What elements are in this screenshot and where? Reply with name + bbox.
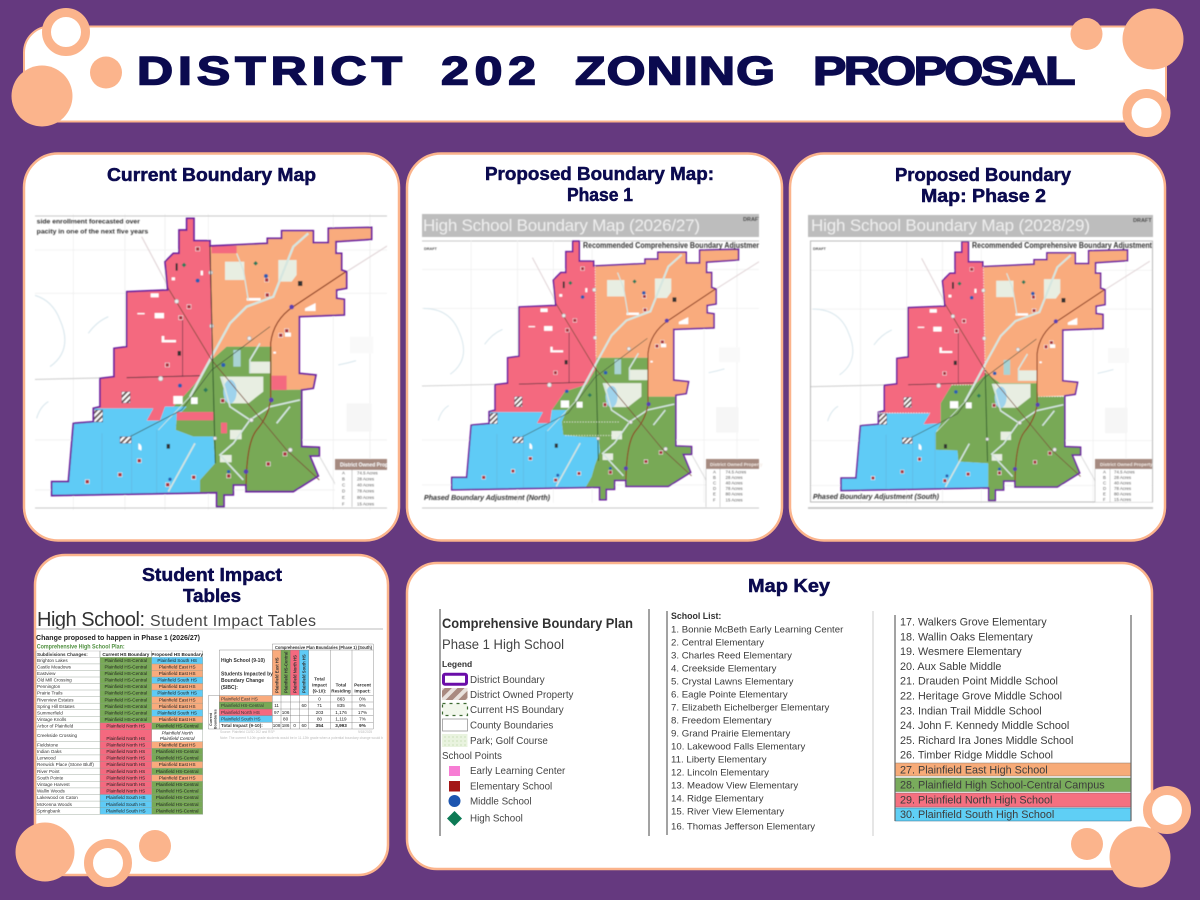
- high school colour rows: [895, 763, 1131, 821]
- legend column: Phase 1 High School: [442, 637, 564, 652]
- table: district owned property: 40 Acres: [357, 482, 375, 488]
- map title band: High School Boundary Map (2028/29): [811, 216, 1090, 235]
- school list: 17-30: 25. Richard Ira Jones Middle School: [900, 735, 1073, 747]
- table: subdivision changes: Lakewood on Caton: [37, 795, 78, 800]
- table: district owned property: 80 Acres: [1114, 492, 1132, 496]
- legend column: High School: [470, 814, 523, 824]
- table: district owned property: C: [713, 480, 716, 486]
- table: subdivision changes: [36, 651, 203, 814]
- table: district owned property: 15 Acres: [357, 502, 375, 506]
- table: district owned property: 74.5 Acres: [726, 470, 747, 474]
- table: students impacted by boundary change: 863: [337, 697, 345, 702]
- map title band: High School Boundary Map (2026/27): [423, 216, 700, 235]
- table: district owned property: C: [342, 482, 345, 488]
- table: students impacted by boundary change: 60: [301, 703, 307, 708]
- table: subdivision changes: Plainfield HS-Central: [104, 665, 147, 670]
- legend column: School Points: [442, 751, 502, 762]
- table: subdivision changes: Plainfield East HS: [159, 775, 196, 780]
- map title band: [422, 214, 762, 237]
- table: subdivision changes: Springbank: [37, 808, 61, 813]
- map: phase 2 boundaries: Recommended Comprehensive Boundary Adjustment: [972, 241, 1152, 250]
- table: students impacted by boundary change: Plainfield HS-Central: [284, 652, 288, 693]
- table: students impacted by boundary change: Total Impact (9-10):: [221, 723, 263, 728]
- table: students impacted by boundary change: 11: [274, 703, 279, 708]
- table: district owned property: [335, 459, 397, 507]
- table: subdivision changes: Plainfield South HS: [157, 658, 197, 663]
- table: subdivision changes: Plainfield HS-Central: [156, 802, 199, 807]
- school list: 17-30: 27. Plainfield East High School: [900, 764, 1048, 776]
- map: phase 1 boundaries: DRAFT: [424, 247, 438, 251]
- school list: 1-16: 7. Elizabeth Eichelberger Elementary: [671, 702, 830, 714]
- table: district owned property: D: [713, 486, 716, 491]
- map: phase 1 boundaries: Recommended Comprehensive Boundary Adjustment: [583, 241, 763, 250]
- table: subdivision changes: Plainfield HS-Central: [156, 795, 199, 800]
- table: subdivision changes: Fieldstone: [37, 742, 59, 747]
- table: district owned property: A: [1103, 470, 1106, 474]
- legend column: Park; Golf Course: [470, 736, 548, 747]
- title: District 202 Zoning Proposal: PROPOSAL: [813, 48, 1076, 93]
- table: district owned property: 28 Acres: [1114, 475, 1132, 480]
- table: students impacted by boundary change: (9-10):: [313, 688, 327, 694]
- table: students impacted by boundary change: Total: [314, 676, 325, 682]
- table: subdivision changes: Plainfield North HS: [106, 789, 145, 794]
- table: students impacted by boundary change: Plainfield HS-Central: [221, 703, 264, 708]
- table: subdivision changes: Wallin Woods: [37, 789, 66, 794]
- table: district owned property: D: [1103, 486, 1106, 491]
- table: district owned property: [1095, 459, 1153, 502]
- table: students impacted by boundary change: Impact:: [354, 688, 371, 694]
- map: current boundaries: pacity in one of the next five years: [37, 228, 148, 235]
- school list: 1-16: 4. Creekside Elementary: [671, 664, 777, 674]
- table: students impacted by boundary change: 80: [317, 717, 322, 722]
- map: phase 1 boundaries: Phased Boundary Adjustment (North): [424, 493, 550, 502]
- table: subdivision changes: Prairie Trails: [37, 691, 63, 696]
- school list: 1-16: 13. Meadow View Elementary: [671, 780, 798, 792]
- table: district owned property: 74.5 Acres: [357, 470, 379, 476]
- table: subdivision changes: Arbor of Plainfield: [37, 724, 74, 728]
- table: subdivision changes: Plainfield HS-Central: [156, 724, 199, 728]
- table: subdivision changes: Plainfield North: [162, 730, 193, 736]
- icon: middle school: [448, 795, 460, 807]
- heading: current boundary map: Current Boundary Map: [107, 165, 316, 185]
- table: students impacted by boundary change: Plainfield South HS: [302, 654, 306, 693]
- table: subdivision changes: McKenna Woods: [37, 802, 73, 807]
- map title band: [808, 215, 1153, 237]
- table: subdivision changes: Plainfield South HS: [106, 808, 146, 813]
- legend column: District Owned Property: [470, 690, 574, 701]
- heading: phase 2: [895, 165, 1071, 206]
- table: subdivision changes: Plainfield East HS: [159, 742, 196, 747]
- icon: county boundaries: [442, 719, 468, 731]
- table: subdivision changes: Plainfield HS-Central: [104, 704, 147, 709]
- table: students impacted by boundary change: 203: [316, 710, 324, 715]
- table: students impacted by boundary change: 9%: [359, 723, 366, 728]
- school list: 1-16: 1. Bonnie McBeth Early Learning Center: [671, 624, 844, 636]
- table: subdivision changes: Plainfield Central: [160, 736, 196, 741]
- table: district owned property: B: [713, 475, 716, 480]
- school list: 17-30: 23. Indian Trail Middle School: [900, 705, 1042, 717]
- icon: park: [442, 734, 468, 747]
- table: subdivision changes: Plainfield East HS: [159, 684, 196, 689]
- school list: 17-30: 28. Plainfield High School-Central Campus: [900, 780, 1105, 792]
- legend column: District Boundary: [470, 675, 545, 686]
- table: students impacted by boundary change: 60: [301, 723, 307, 728]
- panel: proposed boundary map phase 1: [407, 154, 782, 540]
- icon: current hs boundary: [442, 704, 468, 716]
- table: subdivision changes: Riverview Estates: [37, 697, 74, 702]
- legend column: Middle School: [470, 796, 532, 808]
- table: students impacted by boundary change: 106: [282, 710, 290, 715]
- heading: student impact tables: Tables: [183, 586, 241, 606]
- school list: 1-16: 14. Ridge Elementary: [671, 794, 764, 804]
- table: subdivision changes: Plainfield HS-Central: [104, 710, 147, 715]
- table: students impacted by boundary change: Plainfield East HS: [221, 697, 258, 702]
- table: district owned property: A: [713, 470, 716, 474]
- table: students impacted by boundary change: 1,119: [335, 717, 347, 722]
- panel: proposed boundary map phase 2: [790, 154, 1165, 540]
- legend column: Current HS Boundary: [470, 705, 564, 716]
- table: students impacted by boundary change: Note: The current 9-10th grade students would be in 11-12th grade when a potential boundary change would b: [220, 736, 383, 740]
- icon: district boundary: [444, 674, 466, 684]
- school list: 1-16: 6. Eagle Pointe Elementary: [671, 690, 788, 700]
- table: subdivision changes: Plainfield HS-Central: [156, 782, 199, 787]
- heading: phase 2: Map: Phase 2: [921, 186, 1046, 206]
- table: subdivision changes: Spring Hill Estates: [37, 704, 75, 709]
- table: students impacted by boundary change: Percent: [354, 682, 371, 688]
- school list: 1-16: School List:: [671, 611, 721, 621]
- title: District 202 Zoning Proposal: [137, 48, 1076, 93]
- table: subdivision changes: Plainfield East HS: [159, 665, 196, 670]
- school list: 1-16: 10. Lakewood Falls Elementary: [671, 742, 805, 752]
- table: students impacted by boundary change: High School (9-10): [221, 658, 265, 664]
- table: district owned property: 28 Acres: [357, 476, 375, 482]
- table: subdivision changes: Castle Meadows: [37, 665, 72, 670]
- table: subdivision changes: Plainfield South HS: [157, 678, 197, 683]
- table: district owned property: E: [1103, 492, 1106, 496]
- table: students impacted by boundary change: Plainfield East HS: [274, 657, 280, 693]
- table: subdivision changes: Old Mill Crossing: [37, 678, 72, 683]
- table: district owned property: 78 Acres: [726, 486, 743, 491]
- school list: 1-16: 12. Lincoln Elementary: [671, 768, 769, 778]
- table: students impacted by boundary change: Plainfield South HS: [221, 717, 261, 722]
- table: district owned property: B: [342, 476, 345, 482]
- table: district owned property: 40 Acres: [1114, 480, 1132, 486]
- school list: 17-30: 18. Wallin Oaks Elementary: [900, 631, 1033, 643]
- table: subdivision changes: Subdivisions Changes:: [37, 652, 88, 657]
- decorative circles: title top-left: [12, 12, 122, 126]
- table: subdivision changes: Creekside Crossing: [37, 733, 78, 738]
- table: students impacted by boundary change: (SIBC):: [221, 685, 238, 691]
- map title band: DRAFT: [743, 217, 762, 223]
- icon: district owned property: [442, 688, 468, 700]
- table: students impacted by boundary change: 186: [282, 723, 290, 728]
- map: phase 2 boundaries: Phased Boundary Adjustment (South): [813, 492, 939, 501]
- panel: current boundary map: [10, 154, 413, 540]
- table: subdivision changes: Plainfield HS-Central: [104, 684, 147, 689]
- title: District 202 Zoning Proposal: 202: [441, 48, 536, 93]
- table: subdivision changes: Plainfield HS-Central: [104, 678, 147, 683]
- table: students impacted by boundary change: Impact: [312, 682, 327, 688]
- icon: high school: [447, 811, 462, 826]
- table: students impacted by boundary change: 9/18/2025: [358, 730, 372, 734]
- map: phase 2 boundaries: [804, 215, 1165, 508]
- table: students impacted by boundary change: Boundary Change: [221, 678, 264, 684]
- table: students impacted by boundary change: Total: [336, 682, 346, 688]
- map: current boundaries: [34, 214, 388, 510]
- table: students impacted by boundary change: Comprehensive Plan Boundaries (Phase 1) (South): [275, 645, 372, 650]
- table: district owned property: 78 Acres: [357, 488, 375, 494]
- table: subdivision changes: Vintage Knolls: [37, 717, 67, 722]
- decorative circles: map key panel: [1071, 790, 1186, 888]
- decorative circles: title top-right: [1070, 8, 1184, 132]
- school list: 17-30: 29. Plainfield North High School: [900, 794, 1052, 806]
- table: subdivision changes: Plainfield HS-Central: [156, 808, 199, 813]
- table: subdivision changes: Plainfield HS-Central: [104, 691, 147, 696]
- slide heading: Student Impact Tables: [150, 613, 316, 630]
- table: subdivision changes: Lenwood: [37, 756, 56, 761]
- table: district owned property: 15 Acres: [1114, 497, 1132, 502]
- school list: 1-16: [649, 609, 844, 836]
- legend column: Comprehensive Boundary Plan: [442, 615, 633, 631]
- table: subdivision changes: Plainfield North HS: [106, 742, 145, 747]
- table: students impacted by boundary change: 0: [293, 723, 296, 728]
- school list: 17-30: 24. John F. Kennedy Middle School: [900, 720, 1069, 732]
- school list: 1-16: 15. River View Elementary: [671, 806, 784, 818]
- title banner: [24, 26, 1166, 122]
- icon: elementary school: [449, 781, 460, 792]
- table: students impacted by boundary change: 354: [316, 723, 324, 728]
- table: students impacted by boundary change: 0%: [359, 697, 366, 702]
- school list: 1-16: 8. Freedom Elementary: [671, 716, 772, 726]
- table: subdivision changes: Plainfield HS-Central: [156, 756, 199, 761]
- table: subdivision changes: Plainfield HS-Central: [104, 697, 147, 702]
- panel: map key: [407, 563, 1152, 869]
- table: district owned property: B: [1103, 475, 1106, 480]
- table: students impacted by boundary change: Current: [209, 712, 213, 726]
- school list: 17-30: 17. Walkers Grove Elementary: [900, 616, 1047, 628]
- table: district owned property: 80 Acres: [357, 495, 375, 500]
- table: students impacted by boundary change: 835: [337, 703, 345, 708]
- table: subdivision changes: Plainfield South HS: [157, 710, 197, 715]
- school list: 17-30: 30. Plainfield South High School: [900, 809, 1054, 821]
- table: students impacted by boundary change: 80: [283, 717, 289, 722]
- school list: 17-30: 26. Timber Ridge Middle School: [900, 750, 1053, 762]
- table: district owned property: E: [342, 495, 345, 500]
- table: students impacted by boundary change: Residing: [331, 688, 351, 694]
- table: district owned property: F: [342, 502, 345, 506]
- table: subdivision changes: Summerfield: [37, 710, 63, 715]
- table: students impacted by boundary change: 17%: [358, 710, 367, 715]
- table: subdivision changes: Eastview: [37, 671, 56, 676]
- table: subdivision changes: Brighton Lakes: [37, 658, 68, 663]
- table: subdivision changes: River Point: [37, 769, 60, 774]
- decorative circles: student impact panel: [16, 822, 171, 882]
- heading: phase 1: [485, 164, 714, 205]
- slide heading: High School:: [37, 609, 145, 631]
- table: students impacted by boundary change: Source: Plainfield CUSD 202 and RSP: [220, 730, 275, 734]
- table: subdivision changes: South Pointe: [37, 775, 64, 780]
- table: subdivision changes: Plainfield HS-Central: [104, 717, 147, 722]
- table: subdivision changes: Plainfield North HS: [106, 769, 145, 774]
- table: district owned property: A: [342, 470, 345, 476]
- school list: 1-16: 11. Liberty Elementary: [671, 754, 767, 766]
- legend column: [440, 609, 633, 836]
- table: district owned property: 78 Acres: [1114, 486, 1132, 491]
- map: current boundaries: side enrollment forecasted over: [37, 218, 140, 225]
- map title band: DRAFT: [1133, 218, 1152, 224]
- table: students impacted by boundary change: 108: [273, 723, 281, 728]
- school list: 1-16: 5. Crystal Lawns Elementary: [671, 676, 794, 688]
- legend column: Early Learning Center: [470, 766, 566, 777]
- title: District 202 Zoning Proposal: ZONING: [575, 48, 775, 93]
- table: subdivision changes: Plainfield North HS: [106, 762, 145, 767]
- table: subdivision changes: Current HS Boundary: [102, 652, 150, 657]
- table: subdivision changes: Plainfield North HS: [106, 782, 145, 787]
- school list: 17-30: 21. Drauden Point Middle School: [900, 676, 1058, 688]
- table: students impacted by boundary change: Boundaries: [214, 709, 218, 729]
- table: subdivision changes: Plainfield South HS: [106, 802, 146, 807]
- table: district owned property: [706, 459, 763, 507]
- school list: 17-30: [873, 611, 1131, 836]
- table: subdivision changes: Plainfield South HS: [106, 795, 146, 800]
- table: subdivision changes: Plainfield North HS: [106, 749, 145, 754]
- school list: 1-16: 3. Charles Reed Elementary: [671, 650, 792, 662]
- table: district owned property: 74.5 Acres: [1114, 470, 1136, 474]
- table: students impacted by boundary change: 3,993: [335, 723, 347, 728]
- table: students impacted by boundary change: Students Impacted by: [221, 672, 273, 678]
- table: students impacted by boundary change: 1,176: [335, 710, 347, 715]
- heading: map key: Map Key: [748, 576, 830, 596]
- school list: 1-16: 9. Grand Prairie Elementary: [671, 728, 790, 740]
- table: subdivision changes: Pennington: [37, 684, 61, 689]
- legend column: Legend: [442, 659, 472, 669]
- map: phase 1 boundaries: [414, 214, 776, 508]
- table: subdivision changes: Renwick Place (Stone Bluff): [37, 762, 94, 767]
- school list: 17-30: 19. Wesmere Elementary: [900, 646, 1022, 658]
- table: subdivision changes: Plainfield South HS: [157, 691, 197, 696]
- table: students impacted by boundary change: 7%: [359, 717, 366, 722]
- table: subdivision changes: Indian Oaks: [37, 749, 62, 754]
- table: subdivision changes: Plainfield HS-Central: [104, 671, 147, 676]
- slide heading: Change proposed to happen in Phase 1 (2026/27): [36, 635, 200, 642]
- table: subdivision changes: Plainfield North HS: [106, 775, 145, 780]
- school list: 17-30: 22. Heritage Grove Middle School: [900, 690, 1062, 702]
- heading: phase 1: Phase 1: [567, 185, 633, 205]
- title: District 202 Zoning Proposal: DISTRICT: [137, 48, 402, 93]
- table: subdivision changes: Plainfield HS-Central: [156, 749, 199, 754]
- slide heading: [36, 609, 383, 650]
- table: students impacted by boundary change: Plainfield North HS: [292, 655, 298, 693]
- table: district owned property: E: [713, 492, 716, 496]
- table: subdivision changes: Plainfield HS-Central: [156, 769, 199, 774]
- map: phase 2 boundaries: DRAFT: [813, 247, 827, 251]
- table: subdivision changes: Plainfield HS-Central: [104, 658, 147, 663]
- table: subdivision changes: Plainfield North HS: [106, 724, 145, 728]
- icon: early learning center: [449, 766, 460, 776]
- table: district owned property: District Owned Property: [340, 462, 397, 468]
- table: district owned property: 80 Acres: [726, 492, 743, 496]
- table: district owned property: 40 Acres: [726, 480, 743, 486]
- table: subdivision changes: Plainfield East HS: [159, 717, 196, 722]
- table: subdivision changes: Plainfield North HS: [106, 756, 145, 761]
- table: subdivision changes: Plainfield East HS: [159, 671, 196, 676]
- table: students impacted by boundary change: 0: [318, 697, 321, 702]
- table: district owned property: F: [1103, 497, 1106, 502]
- table: students impacted by boundary change: 9%: [359, 703, 366, 708]
- table: subdivision changes: Plainfield HS-Central: [156, 789, 199, 794]
- heading: phase 1: Proposed Boundary Map:: [485, 164, 714, 184]
- table: students impacted by boundary change: Plainfield North HS: [221, 710, 260, 715]
- heading: student impact tables: [142, 565, 282, 606]
- table: subdivision changes: Vintage Harvest: [37, 782, 70, 787]
- table: subdivision changes: Plainfield East HS: [159, 697, 196, 702]
- table: district owned property: District Owned Property: [710, 462, 763, 467]
- table: district owned property: D: [342, 488, 345, 494]
- table: district owned property: C: [1103, 480, 1106, 486]
- slide heading: Comprehensive High School Plan:: [37, 644, 125, 650]
- table: district owned property: 15 Acres: [726, 498, 743, 502]
- legend column: County Boundaries: [470, 720, 553, 732]
- table: subdivision changes: Plainfield East HS: [159, 704, 196, 709]
- school list: 1-16: 2. Central Elementary: [671, 638, 764, 648]
- table: students impacted by boundary change: 97: [274, 710, 280, 715]
- table: subdivision changes: Plainfield East HS: [159, 762, 196, 767]
- school list: 17-30: 20. Aux Sable Middle: [900, 661, 1001, 673]
- table: district owned property: District Owned Property: [1100, 462, 1153, 467]
- table: district owned property: 28 Acres: [726, 475, 743, 480]
- table: subdivision changes: Plainfield North HS: [106, 736, 145, 741]
- heading: phase 2: Proposed Boundary: [895, 165, 1071, 185]
- panel: student impact tables: [35, 555, 388, 875]
- legend column: Elementary School: [470, 782, 552, 792]
- table: district owned property: F: [713, 498, 716, 502]
- table: students impacted by boundary change: 71: [317, 703, 322, 708]
- table: subdivision changes: Proposed HS Boundary: [151, 652, 203, 657]
- school list: 1-16: 16. Thomas Jefferson Elementary: [671, 822, 815, 832]
- table: students impacted by boundary change: [208, 644, 383, 740]
- heading: student impact tables: Student Impact: [142, 565, 282, 585]
